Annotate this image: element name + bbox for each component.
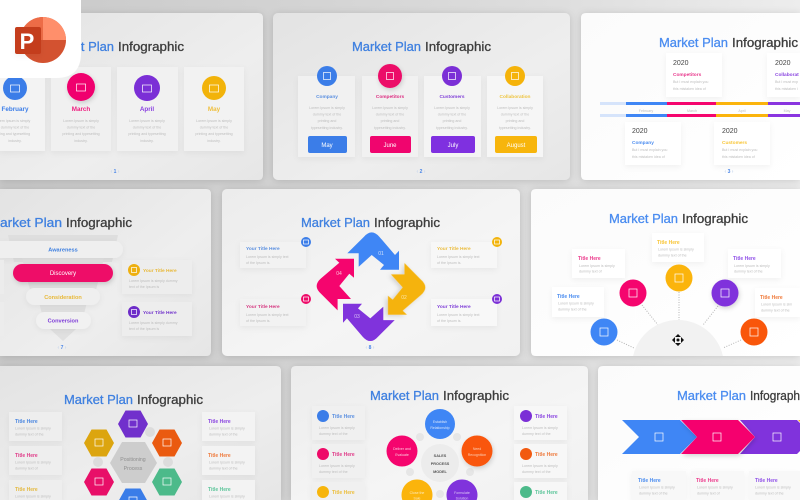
timeline bands: May [784,109,791,113]
card: blue: dummy text of the [639,492,668,496]
semicircle hub [633,320,723,356]
node: yellow: Lorem Ipsum is simply [658,248,694,252]
card: May [184,67,244,151]
arrow: 04 pink: 04 [336,271,342,277]
card: blue: Lorem Ipsum is simply text [246,255,289,259]
card: March: printing and typesetting [62,132,100,136]
node: yellow [652,233,704,292]
card: Customers: dummy text of the [438,112,466,116]
card: pink: Lorem Ipsum is simply text [246,313,289,317]
card: Collaboration: printing and [506,119,524,123]
card: March [51,67,111,151]
left cards: dummy text of [15,466,38,470]
card: May: dummy text of the [200,126,228,130]
card: May: industry. [207,139,221,143]
card: February: ing and typesetting [0,132,30,136]
right icon cards: Title Here [535,490,558,496]
right icon cards: Lorem Ipsum is simply [522,426,558,430]
card: purple [431,294,502,326]
right icon cards: dummy text of the [522,432,551,436]
card: Company: Company [316,94,338,100]
chevron: purple [740,420,800,454]
card: Customers: printing and [443,119,461,123]
hexagon cluster: Positioning [120,457,146,463]
card: Customers: Lorem Ipsum is simply [434,106,470,110]
title: Infographic [682,211,749,226]
card: purple [749,471,800,500]
card: March: industry. [74,139,88,143]
left cards: Title Here [15,419,38,425]
card: Competitors: printing and [381,119,399,123]
left icon cards: dummy text of the [319,432,348,436]
title: Market Plan [301,215,370,230]
card: Customers 2020: this mistaken idea of [722,155,755,159]
card: Company 2020: 2020 [632,128,648,135]
node: pink [572,249,646,306]
card: yellow title: text of the Ipsum is [129,285,159,289]
title: Infographic [425,39,492,54]
card: Customers 2020 [714,122,770,165]
card: April: industry. [140,139,154,143]
card: pink: Your Title Here [246,304,280,310]
card: purple: of the Ipsum is. [437,319,461,323]
card: Company: printing and [318,119,336,123]
left icon cards: dummy text of the [319,470,348,474]
title: Market Plan [64,392,133,407]
card: Competitors: June [383,143,397,149]
panel: slide 4 funnel [0,189,211,356]
timeline bands: February [639,109,653,113]
left icon cards: Title Here [332,414,355,420]
card: May: Lorem Ipsum is simply [196,119,232,123]
card: Company 2020: But I must explain you [632,148,667,152]
right icon cards: Title Here [535,452,558,458]
arrow: 02 yellow: 02 [401,295,407,301]
card: purple title: text of the Ipsum is [129,327,159,331]
page number: ‹ 1 › [111,169,120,175]
right cards: Title Here [208,487,231,493]
funnel: Consideration [44,295,82,301]
card: yellow [431,237,502,268]
title [0,215,133,230]
title [352,39,492,54]
panel: slide 5 cycle arrows [222,189,520,356]
card: Customers: Customers [439,94,465,100]
left icon cards: Title Here [332,490,355,496]
card: Collaboration: August [507,143,526,149]
card: Competitors: typesetting industry. [374,126,406,130]
dotted connectors [617,292,741,348]
card: Collaboration: typesetting industry. [499,126,531,130]
card: April [117,67,178,151]
card: Collaboration 2020 [767,53,800,97]
card: February: em Ipsum is simply [0,119,30,123]
card: Collaboration 2020: Collaborat [775,72,799,78]
timeline bands [600,102,800,117]
panel: slide 3 timeline [581,13,800,180]
card: Customers 2020: Customers [722,140,747,146]
card: purple title [122,302,192,336]
hexagon cluster [84,410,182,500]
title: Market Plan [659,35,728,50]
node: orange: Lorem Ipsum is sim [761,302,792,306]
card: February [0,67,45,151]
card: Company 2020 [625,122,681,165]
sales process cycle: Deliver and [393,447,411,451]
page number: ‹ 7 › [58,345,67,351]
panel: slide 2 months with buttons [273,13,570,180]
arrow: 01 blue [347,232,399,270]
right cards: Title Here [208,453,231,459]
left icon cards: Lorem Ipsum is simply [319,426,355,430]
right cards: dummy text of the [209,432,238,436]
left icon cards [312,406,365,500]
panel: slide 1 months [0,13,263,180]
title: Market Plan [352,39,421,54]
node: orange: dummy text of the [761,308,790,312]
title [677,388,800,403]
card: Company: Lorem Ipsum is simply [309,106,345,110]
node: blue [552,287,618,346]
panel: slide 7 positioning hexagons [0,366,281,500]
funnel [0,235,123,341]
card: Collaboration 2020: this mistaken i [775,87,798,91]
card: April: Lorem Ipsum is simply [129,119,165,123]
card: March: March [72,106,90,113]
funnel: Discovery [50,271,76,277]
card: pink [240,294,311,326]
card: purple: dummy text of the [755,492,784,496]
card: May: May [208,106,221,113]
title: Infographic [66,215,133,230]
timeline bands: April [738,109,746,113]
card: Customers [424,66,481,157]
card: Company: typesetting industry. [311,126,343,130]
node: blue: Lorem Ipsum is simply [558,302,594,306]
right cards: Lorem Ipsum is simply [209,426,245,430]
card: yellow: Lorem Ipsum is simply text [437,255,480,259]
left cards: Title Here [15,487,38,493]
title: Market Plan [370,388,439,403]
PowerPoint badge [0,0,81,78]
title [370,388,510,403]
title [609,211,749,226]
page number: ‹ 2 › [417,169,426,175]
title [659,35,799,50]
card: Customers: typesetting industry. [436,126,468,130]
card: purple: Your Title Here [437,304,471,310]
card: February: industry. [8,139,22,143]
left cards: dummy text of the [15,432,44,436]
chevron: blue [622,420,697,454]
funnel: Conversion [48,318,79,324]
card: Competitors 2020: But I must explain you [673,80,708,84]
card: pink: dummy text of [697,492,720,496]
card: Collaboration 2020: But I must exp [775,80,798,84]
sales process cycle: Need [473,447,481,451]
node: purple: Title Here [733,256,756,262]
card: blue: Title Here [638,478,661,484]
right cards [202,412,255,500]
left cards: Lorem Ipsum is simply [15,460,51,464]
card: Collaboration: Collaboration [500,94,531,100]
sales process cycle: Formulate [454,491,470,495]
card: April: April [140,106,154,113]
card: purple: Title Here [755,478,778,484]
node: pink: dummy text of [579,270,602,274]
side cards left [0,260,4,336]
node: blue: Title Here [557,294,580,300]
card: Customers 2020: But I must explain you [722,148,757,152]
title: Infographic [137,392,204,407]
title: Infographic [443,388,510,403]
title: Market Plan [677,388,746,403]
sales process cycle [386,409,492,500]
title [45,39,185,54]
sales process cycle: Establish [433,420,447,424]
node: purple: Lorem Ipsum is simply [734,264,770,268]
card: blue: Your Title Here [246,246,280,252]
card: blue: Lorem Ipsum is simply [639,486,675,490]
card: yellow: of the Ipsum is. [437,261,461,265]
icon: PowerPoint logo: P [20,29,34,54]
sales process cycle: SALES [434,454,447,458]
card: April: dummy text of the [133,126,161,130]
title: arket Plan [0,215,62,230]
card: Customers 2020: 2020 [722,128,738,135]
arrow: 03 purple [343,304,395,341]
panel: slide 9 chevrons [598,366,800,500]
left cards: Lorem Ipsum is simply [15,494,51,498]
right cards: Lorem Ipsum is simply [209,460,245,464]
card: blue: of the Ipsum is. [246,261,270,265]
card: yellow title: Lorem Ipsum is simply dummy [129,279,178,283]
title: Infographic [374,215,441,230]
card: Competitors 2020: 2020 [673,60,689,67]
card: blue [240,237,311,268]
title: Infographic [732,35,799,50]
card: Collaboration: dummy text of the [501,112,529,116]
card: Competitors 2020: this mistaken idea of [673,87,706,91]
card: Company 2020: Company [632,140,654,146]
title [301,215,441,230]
card: purple: Lorem Ipsum is simply text [437,313,480,317]
right icon cards [514,406,567,500]
title: Infographic [118,39,185,54]
sales process cycle: Relationship [430,426,450,430]
title [64,392,204,407]
left cards: Lorem Ipsum is simply [15,426,51,430]
funnel: Awareness [48,248,78,254]
panel: slide 6 semicircle radial [531,189,800,356]
right icon cards: Title Here [535,414,558,420]
card: Collaboration: Lorem Ipsum is simply [497,106,533,110]
left icon cards: Lorem Ipsum is simply [319,464,355,468]
card: March: dummy text of the [67,126,95,130]
left icon cards: Title Here [332,452,355,458]
node: orange [740,288,800,346]
card: Competitors: Lorem Ipsum is simply [372,106,408,110]
card: Competitors [362,64,418,157]
card: Company: May [321,143,333,149]
right cards: Lorem Ipsum is simply [209,494,245,498]
sales process cycle: PROCESS [431,462,450,466]
left cards [9,412,62,500]
node: orange: Title Here [760,295,783,301]
card: Competitors 2020: Competitors [673,72,702,78]
node: pink: Title Here [578,256,601,262]
card: Company 2020: this mistaken idea of [632,155,665,159]
card: Competitors 2020 [666,53,722,97]
card: pink: Lorem Ipsum is simply [697,486,733,490]
page number: ‹ 3 › [725,169,734,175]
left cards: Title Here [15,453,38,459]
card: pink: of the Ipsum is. [246,319,270,323]
card: Company: dummy text of the [313,112,341,116]
timeline bands: March [687,109,697,113]
card: Collaboration [487,66,543,157]
arrow: 01 blue: 01 [378,251,384,257]
card: pink: Title Here [696,478,719,484]
panel: slide 8 sales process model [291,366,588,500]
right icon cards: Lorem Ipsum is simply [522,464,558,468]
card: April: printing and typesetting [128,132,166,136]
card: Collaboration 2020: 2020 [775,60,791,67]
page number: ‹ 8 › [366,345,375,351]
card: February: February [2,106,29,113]
card: Competitors: dummy text of the [376,112,404,116]
card: March: Lorem Ipsum is simply [63,119,99,123]
node: purple: dummy text of the [734,270,763,274]
node: blue: dummy text of the [558,308,587,312]
arrow: 03 purple: 03 [354,314,360,320]
card: yellow: Your Title Here [437,246,471,252]
arrow: 02 yellow [388,263,425,315]
card: Company [298,66,355,157]
card: February: dummy text of the [1,126,29,130]
card: yellow title [122,260,192,294]
card: blue [632,471,686,500]
card: purple title: Your Title Here [143,310,177,316]
right cards: Title Here [208,419,231,425]
arrow: 04 pink [317,259,354,310]
card: purple title: Lorem Ipsum is simply dummy [129,321,178,325]
card: Competitors: Competitors [376,94,404,100]
node: purple [712,249,781,306]
sales process cycle: Close the [410,491,424,495]
sales process cycle: Recognition [468,453,486,457]
sales process cycle: Evaluate [395,453,409,457]
hexagon cluster: Process [124,466,143,472]
chevron: pink [681,420,755,454]
node: pink: Lorem Ipsum is simply [579,264,615,268]
title: Market Plan [45,39,114,54]
card: pink [691,471,744,500]
card: Customers: July [448,143,458,149]
title: Market Plan [609,211,678,226]
node: yellow: dummy text of the [658,254,687,258]
right cards: dummy text of the [209,466,238,470]
right icon cards: dummy text of the [522,470,551,474]
node: yellow: Title Here [657,240,680,246]
card: May: printing and typesetting [195,132,233,136]
chevron: yellow [798,420,800,422]
card: yellow title: Your Title Here [143,268,177,274]
card: purple: Lorem Ipsum is simply [755,486,791,490]
sales process cycle: MODEL [433,470,448,474]
